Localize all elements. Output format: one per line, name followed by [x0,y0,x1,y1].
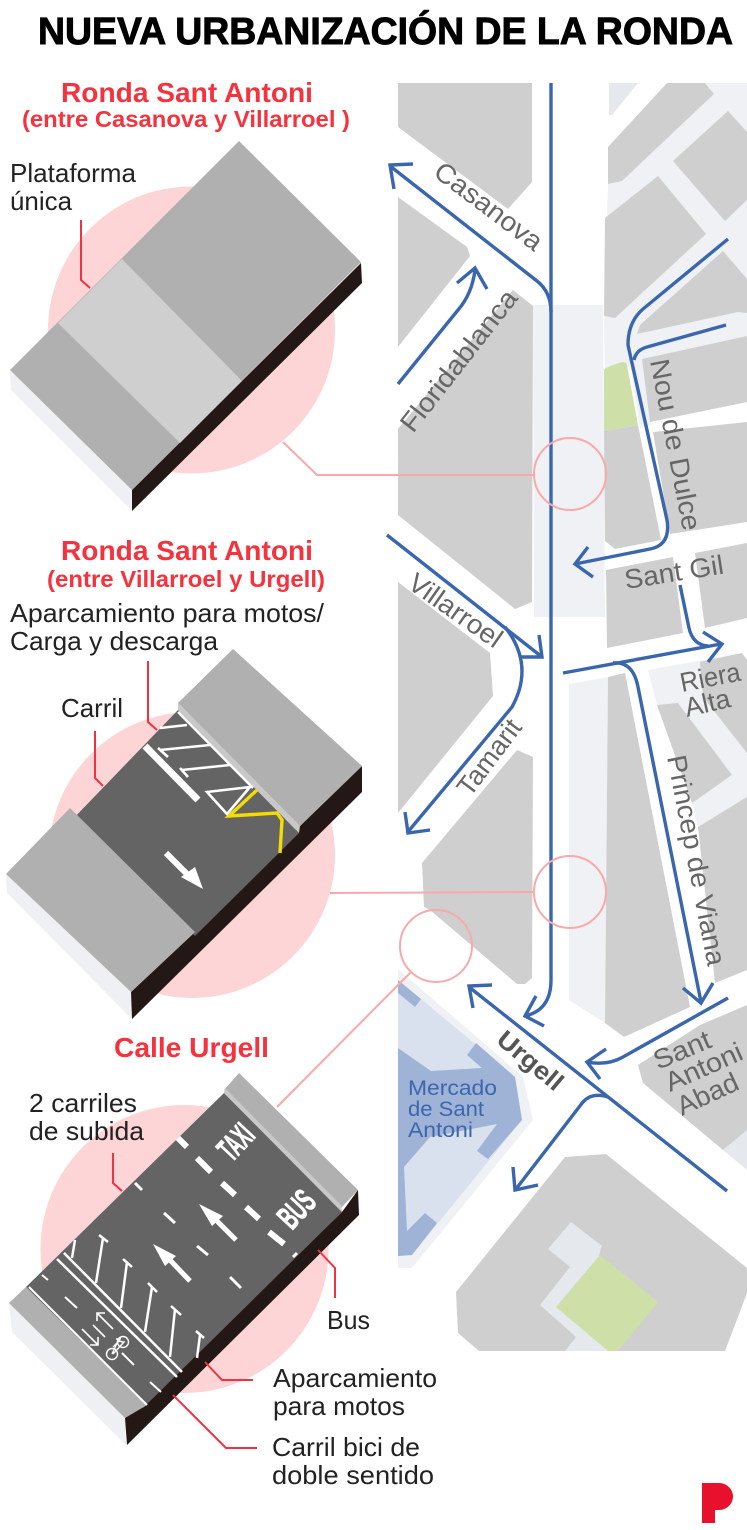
heading: Ronda Sant Antoni [61,77,313,108]
map: street names: Antoni [660,1037,747,1097]
label: aparcamiento motos: Carga y descarga [10,626,219,656]
map: street names: Princep de Viana [661,752,732,969]
label: carril: Carril [61,693,123,723]
pink circle [49,712,335,998]
street block [10,141,362,511]
map: market label: de Sant [408,1098,484,1121]
heading: (entre Casanova y Villarroel ) [22,106,350,132]
map: street names: Villarroel [403,567,508,654]
map: street names: Sant Gil [622,550,726,595]
road markings [145,712,282,889]
map: street names: Sant [649,1024,716,1076]
map: Mercado de Sant Antoni building [398,969,533,1268]
map: street background [533,83,747,1170]
road markings: TAXI [210,1116,262,1168]
map: street names: Urgell [491,1025,569,1097]
label: plataforma única: única [10,186,73,216]
panel: Ronda Sant Antoni (Villarroel-Urgell) [6,535,362,1019]
leader lines [95,661,157,786]
label: aparcamiento para motos: para motos [273,1391,405,1421]
map: market label [408,1077,497,1142]
leader lines [113,1153,335,1448]
panel: Calle Urgell [9,1032,437,1490]
locator circles and connectors [277,438,606,1107]
heading [47,535,325,592]
label: aparcamiento motos [10,598,325,656]
map: market label: Antoni [408,1119,473,1142]
map: street names: Abad [672,1067,743,1121]
street block [6,649,362,1019]
map: street names: Casanova [428,156,549,257]
heading: (entre Villarroel y Urgell) [47,566,325,592]
map: courtyard and parks [540,362,658,1351]
label: plataforma única [10,158,137,216]
label: carril bici: Carril bici de [272,1432,420,1462]
label: carril bici: doble sentido [272,1460,434,1490]
map: market label: Mercado [408,1077,497,1100]
heading: Calle Urgell [114,1032,269,1063]
road markings [29,1116,324,1405]
panel: Ronda Sant Antoni (Casanova-Villarroel) [10,77,362,511]
map: city blocks [398,83,747,1351]
heading: Ronda Sant Antoni [61,535,313,566]
label: 2 carriles de subida: de subida [29,1116,145,1146]
label: carril bici [272,1432,434,1490]
heading [22,77,350,132]
logo [702,1483,733,1523]
label: aparcamiento para motos [273,1363,437,1421]
street block [9,1073,359,1445]
pink circle [48,186,335,474]
label: 2 carriles de subida [29,1088,145,1146]
road markings: BUS [270,1183,324,1236]
title: NUEVA URBANIZACIÓN DE LA RONDA [38,9,733,53]
map: street names: Floridablanca [394,283,524,438]
pink circle [40,1105,328,1393]
label: 2 carriles de subida: 2 carriles [29,1088,137,1118]
map: street names [394,156,747,1121]
map [387,83,747,1351]
map: street names: Nou de Dulce [644,356,707,533]
label: aparcamiento motos: Aparcamiento para motos/ [10,598,325,628]
label: bus: Bus [327,1305,370,1335]
map: street names: Tamarit [451,713,528,802]
label: plataforma única: Plataforma [10,158,137,188]
leader line [81,220,90,288]
label: aparcamiento para motos: Aparcamiento [273,1363,437,1393]
map: blue traffic arrows [387,83,728,1191]
map: street names: Alta [682,683,734,723]
map: street names: Riera [677,657,744,698]
